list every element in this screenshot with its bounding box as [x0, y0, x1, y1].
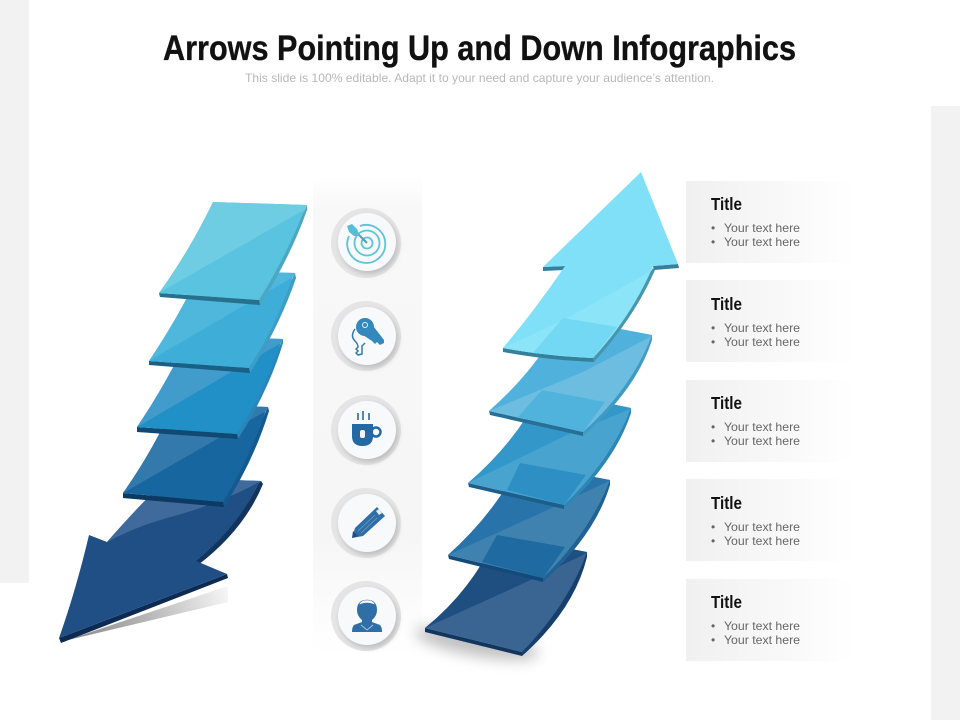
panel: text box 1: Title: [711, 194, 742, 214]
panel: text box 5: Your text here: [724, 619, 800, 633]
panel: icon column: [313, 175, 422, 655]
panel: text box 3: •: [711, 420, 715, 434]
title: Arrows Pointing Up and Down Infographics: [163, 29, 796, 68]
step 1: [159, 202, 307, 305]
panel: text box 1: •: [711, 235, 715, 249]
icon: keys: [331, 301, 401, 371]
panel: text box 1: Your text here: [724, 221, 800, 235]
arrow shadow: [414, 619, 540, 667]
step 5: [425, 535, 587, 656]
step 2: [149, 270, 296, 373]
panel: text box 3: •: [711, 434, 715, 448]
step 3: [468, 390, 631, 509]
panel: text box 2: •: [711, 321, 715, 335]
arrow shadow: [64, 586, 228, 641]
panel: text box 4: •: [711, 534, 715, 548]
panel: text box 5: Title: [711, 592, 742, 612]
panel: text box 4: Your text here: [724, 520, 800, 534]
panel: text box 5: •: [711, 633, 715, 647]
icon: cup: [331, 395, 401, 465]
subtitle: This slide is 100% editable. Adapt it to your need and capture your audience’s attention.: [245, 71, 714, 85]
panel: text box 3: Your text here: [724, 420, 800, 434]
panel: text box 5: Your text here: [724, 633, 800, 647]
up arrow: [414, 172, 679, 667]
panel: text box 1: Your text here: [724, 235, 800, 249]
panel: text box 1: •: [711, 221, 715, 235]
panel: text box 4: Your text here: [724, 534, 800, 548]
arrowhead segment: [59, 478, 263, 643]
panel: text box 3: Title: [711, 393, 742, 413]
panel: text box 2: [686, 280, 855, 362]
panel: text box 2: Your text here: [724, 335, 800, 349]
panel: text box 5: •: [711, 619, 715, 633]
panel: text box 3: Your text here: [724, 434, 800, 448]
panel: text box 1: [686, 181, 855, 263]
arrowhead segment: [503, 172, 679, 362]
step 3: [137, 336, 283, 439]
icon: target: [331, 208, 401, 278]
step 4: [448, 463, 610, 582]
panel: text box 2: Your text here: [724, 321, 800, 335]
down arrow: [59, 202, 307, 643]
step 2: [489, 318, 652, 436]
icon: pencil: [331, 488, 401, 558]
icon: person: [331, 581, 401, 651]
step 4: [123, 404, 269, 507]
panel: text box 3: [686, 380, 855, 462]
panel: text box 2: Title: [711, 294, 742, 314]
panel: text box 4: [686, 479, 855, 561]
panel: text box 4: Title: [711, 493, 742, 513]
panel: text box 4: •: [711, 520, 715, 534]
panel: text box 5: [686, 579, 855, 661]
panel: text box 2: •: [711, 335, 715, 349]
